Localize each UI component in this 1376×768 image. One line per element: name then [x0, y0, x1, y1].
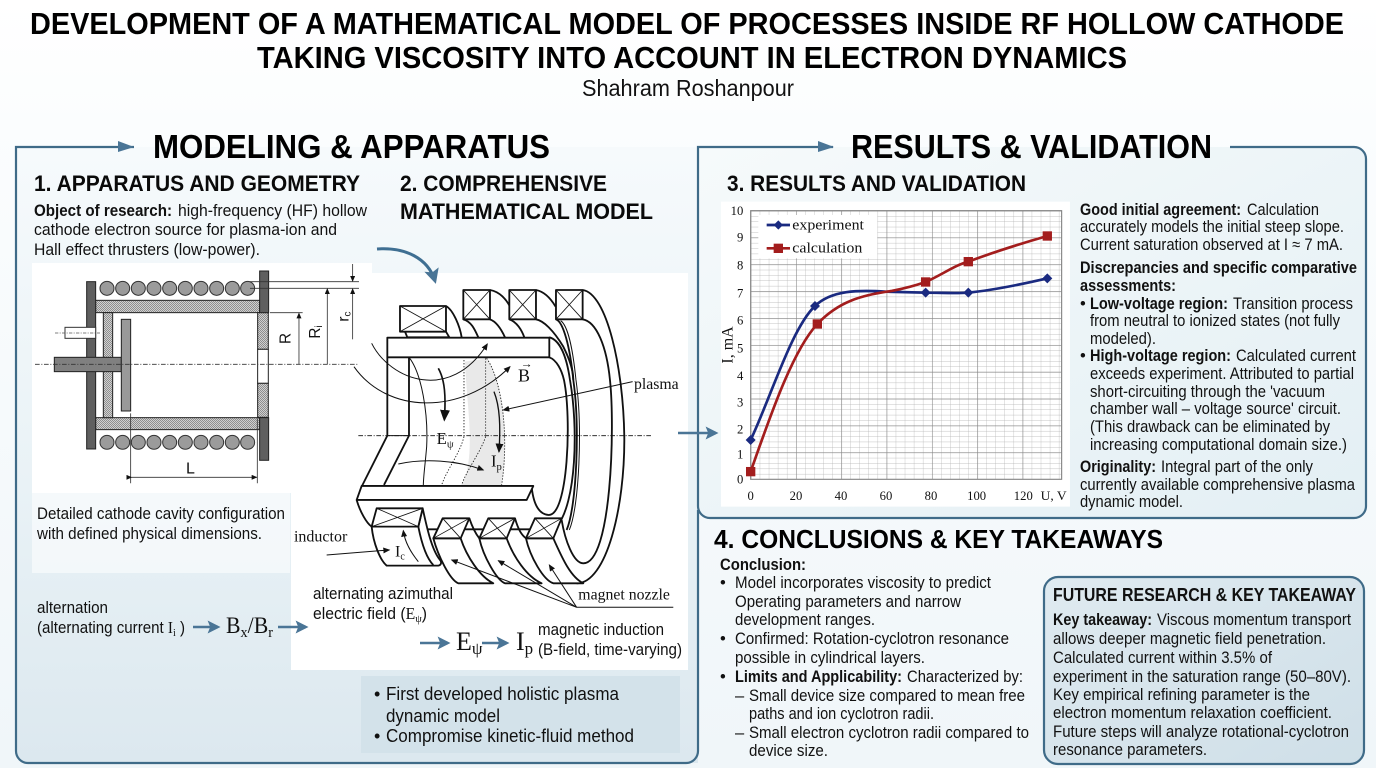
chart y axis labels: 1 [737, 448, 743, 462]
diagram labels: magnet nozzle [578, 586, 670, 603]
diagram labels: c [400, 551, 405, 562]
chart y axis labels: 3 [737, 396, 743, 410]
text: results commentary: Calculation [1247, 201, 1319, 219]
diagram: hollow cathode cross-section [35, 264, 359, 483]
text: conclusions: Limits and Applicability: [735, 668, 902, 686]
chart y axis labels: I, mA [719, 326, 736, 364]
section heading 2: MATHEMATICAL MODEL [400, 199, 653, 224]
diagram labels: plasma [634, 376, 679, 393]
chart y axis labels: 10 [731, 204, 743, 218]
flow: Bx/Br: r [268, 625, 273, 641]
text: results commentary: dynamic model. [1080, 493, 1183, 511]
text: results commentary: Transition process [1233, 295, 1353, 313]
centre line [358, 434, 653, 437]
section heading 1: 1. APPARATUS AND GEOMETRY [34, 171, 360, 196]
text: results commentary: increasing computational domain size.) [1090, 436, 1347, 454]
text: results commentary: • [1080, 295, 1086, 313]
bottom coil 2 [433, 538, 493, 583]
chart x axis labels [747, 489, 1067, 503]
flow arrow [193, 626, 218, 628]
panel: future research and key takeaway: Viscous momentum transport [1157, 611, 1351, 629]
callout: model highlights [361, 676, 680, 753]
chart x axis labels: 80 [925, 489, 937, 503]
text: conclusions [720, 556, 1029, 760]
panel: future research and key takeaway: Key takeaway: [1053, 611, 1152, 629]
chart y axis labels: 7 [737, 286, 743, 300]
chart x axis labels: 40 [835, 489, 847, 503]
chart legend: calculation [792, 241, 863, 257]
chart y axis labels: 2 [737, 422, 743, 436]
text: results commentary: accurately models the initial steep slope. [1080, 218, 1344, 236]
flow: I p: I [516, 627, 525, 656]
diagram: hollow cathode cross-section: i [314, 325, 325, 328]
text: results commentary: Integral part of the only [1161, 458, 1314, 476]
panel: future research and key takeaway: Future steps will analyze rotational-cyclotron [1053, 723, 1349, 741]
text: results commentary [1080, 201, 1357, 511]
diagram: hollow cathode cross-section: R [307, 328, 324, 339]
text: results commentary: Originality: [1080, 458, 1156, 476]
chart legend: experiment [792, 217, 865, 233]
callout: model highlights: Compromise kinetic-fluid method [386, 726, 634, 746]
text: conclusions: possible in cylindrical layers. [735, 649, 925, 667]
tube [549, 337, 575, 527]
diagram labels: B [518, 366, 530, 386]
caption: cathode cavity [36, 505, 285, 543]
caption: cathode cavity: with defined physical dimensions. [36, 525, 262, 543]
diagram labels [294, 356, 679, 603]
text: results commentary: chamber wall – voltage source' circuit. [1090, 400, 1341, 418]
flow: Bx/Br: B [226, 613, 241, 638]
flow: alternation label: alternation [37, 599, 108, 617]
panel: future research and key takeaway: Calculated current within 3.5% of [1053, 649, 1272, 667]
flow: magnetic induction label [538, 621, 682, 659]
callout: model highlights: dynamic model [386, 706, 500, 726]
text: object of research: Hall effect thrusters (low-power). [34, 241, 260, 259]
panel: future research and key takeaway: Key empirical refining parameter is the [1053, 686, 1310, 704]
flow: alternation label [37, 599, 185, 639]
text: results commentary: modeled). [1090, 330, 1156, 348]
title [30, 6, 1344, 75]
panel: future research and key takeaway [1044, 577, 1364, 764]
text: results commentary: High-voltage region: [1090, 347, 1231, 365]
title: TAKING VISCOSITY INTO ACCOUNT IN ELECTRON DYNAMICS [257, 40, 1127, 75]
flow: alternation label: (alternating current I [37, 618, 176, 637]
text: conclusions: Model incorporates viscosity to predict [735, 574, 991, 592]
chart y axis labels: 5 [737, 341, 743, 355]
text: conclusions: Conclusion: [720, 556, 806, 574]
callout: model highlights: First developed holistic plasma [386, 684, 620, 704]
text: conclusions: • [720, 630, 726, 648]
outer rings [577, 290, 624, 583]
chart x axis labels: 20 [790, 489, 802, 503]
flow: magnetic induction label: magnetic induction [538, 621, 664, 639]
curve: calculation [746, 231, 1052, 476]
flow: alternation label: ) [176, 619, 185, 637]
arrow: model to results [678, 432, 716, 434]
diagram labels: I [491, 452, 497, 471]
chart y axis labels: 6 [737, 314, 743, 328]
panel: future research and key takeaway: experiment in the saturation range (50–80V). [1053, 668, 1351, 686]
diagram labels: I [395, 544, 400, 561]
text: results commentary: Low-voltage region: [1090, 295, 1228, 313]
diagram: RF hollow cathode model [294, 290, 679, 607]
panel: future research and key takeaway: electron momentum relaxation coefficient. [1053, 704, 1332, 722]
bottom coil 3 [479, 538, 542, 583]
text: conclusions: – [735, 724, 745, 742]
arrow: curved to model diagram [377, 249, 435, 281]
section heading 3: 3. RESULTS AND VALIDATION [727, 171, 1026, 196]
text: conclusions: • [720, 574, 726, 592]
text: results commentary: Calculated current [1236, 347, 1356, 365]
flow arrow [420, 642, 448, 644]
text: results commentary: • [1080, 347, 1086, 365]
heading: modeling and apparatus: MODELING & APPARATUS [153, 128, 550, 165]
flow: Bx/Br: /B [248, 613, 268, 638]
diagram labels: inductor [294, 529, 348, 546]
chart y axis labels: 0 [737, 473, 743, 487]
panel: modeling and apparatus [16, 147, 698, 763]
text: object of research: Object of research: [34, 202, 172, 220]
arrow: results heading [818, 141, 834, 152]
panel: future research and key takeaway: resonance parameters. [1053, 741, 1207, 759]
chart legend [758, 215, 877, 258]
diagram: hollow cathode cross-section: r [335, 317, 352, 322]
chart: current vs voltage [719, 202, 1070, 507]
text: conclusions: development ranges. [735, 611, 875, 629]
diagram backgrounds [32, 263, 688, 670]
top coils [400, 306, 446, 332]
text: object of research [34, 202, 367, 259]
text: results commentary: from neutral to ionized states (not fully [1090, 312, 1341, 330]
caption: cathode cavity: Detailed cathode cavity configuration [37, 505, 285, 523]
bottom coil 1 [372, 508, 441, 566]
text: results commentary: Current saturation observed at I ≈ 7 mA. [1080, 236, 1343, 254]
flow: azimuthal field label: ) [422, 605, 427, 623]
diagram labels: ψ [447, 439, 454, 450]
chart x axis labels: U, V [1041, 489, 1067, 503]
flow arrow [278, 626, 306, 628]
flow: I p: p [525, 639, 533, 658]
section heading 2 [400, 171, 653, 224]
text: conclusions: Small electron cyclotron radii compared to [749, 724, 1029, 742]
chart y axis labels: 9 [737, 230, 743, 244]
text: conclusions: device size. [749, 742, 828, 760]
chart x axis labels: 60 [880, 489, 892, 503]
flow: azimuthal field label [313, 585, 453, 625]
chart y axis labels: 4 [737, 369, 744, 383]
diagram: hollow cathode cross-section: R [278, 333, 295, 344]
plasma shading [462, 358, 505, 485]
diagram: hollow cathode cross-section: c [342, 312, 353, 317]
text: results commentary: exceeds experiment. Attributed to partial [1090, 365, 1354, 383]
text: conclusions: Small device size compared to mean free [749, 687, 1025, 705]
bottom coil 4 [526, 538, 583, 583]
panel: results and validation [698, 147, 1366, 518]
diagram: hollow cathode cross-section: L [186, 460, 195, 477]
diagram labels: p [497, 462, 502, 473]
flow: E psi: ψ [472, 639, 483, 658]
section heading 4: 4. CONCLUSIONS & KEY TAKEAWAYS [714, 524, 1163, 554]
text: conclusions: Characterized by: [907, 668, 1023, 686]
text: conclusions: paths and ion cyclotron radii. [749, 705, 934, 723]
callout: model highlights: • [374, 726, 380, 746]
text: conclusions: Confirmed: Rotation-cyclotron resonance [735, 630, 1009, 648]
heading: results and validation: RESULTS & VALIDATION [851, 128, 1212, 165]
flow arrow [482, 642, 507, 644]
chart y axis labels: 8 [737, 258, 743, 272]
flow: azimuthal field label: alternating azimuthal [313, 585, 453, 603]
text: conclusions: Operating parameters and narrow [735, 593, 961, 611]
flow: magnetic induction label: (B-field, time-varying) [538, 641, 682, 659]
diagram labels: → [521, 356, 533, 370]
dotted lines [442, 358, 505, 485]
flow: alternation label: i [173, 627, 176, 639]
author: Shahram Roshanpour [582, 75, 794, 101]
chart x axis labels: 120 [1014, 489, 1033, 503]
text: results commentary: (This drawback can be eliminated by [1090, 418, 1331, 436]
field lines [372, 343, 487, 380]
flow: Bx/Br: x [241, 625, 248, 641]
callout: model highlights: • [374, 684, 380, 704]
chart grid [751, 211, 1062, 479]
arrow: modeling heading [118, 141, 134, 152]
curve: experiment [746, 273, 1052, 445]
chart x axis labels: 0 [747, 489, 754, 503]
text: conclusions: • [720, 668, 726, 686]
chart x axis labels: 100 [967, 489, 986, 503]
text: results commentary: assessments: [1080, 277, 1176, 295]
diagram labels: E [437, 429, 447, 448]
chart y axis labels [719, 204, 744, 487]
text: results commentary: short-circuiting through the 'vacuum [1090, 383, 1325, 401]
panel: future research and key takeaway: allows deeper magnetic field penetration. [1053, 630, 1326, 648]
flow: azimuthal field label: electric field (E [313, 604, 416, 623]
flow: azimuthal field label: ψ [415, 613, 422, 625]
section heading 2: 2. COMPREHENSIVE [400, 171, 607, 196]
text: conclusions: – [735, 687, 745, 705]
text: object of research: cathode electron source for plasma-ion and [34, 221, 337, 239]
text: object of research: high-frequency (HF) hollow [178, 202, 367, 220]
flow: E psi: E [456, 627, 472, 656]
text: results commentary: Good initial agreement: [1080, 201, 1241, 219]
